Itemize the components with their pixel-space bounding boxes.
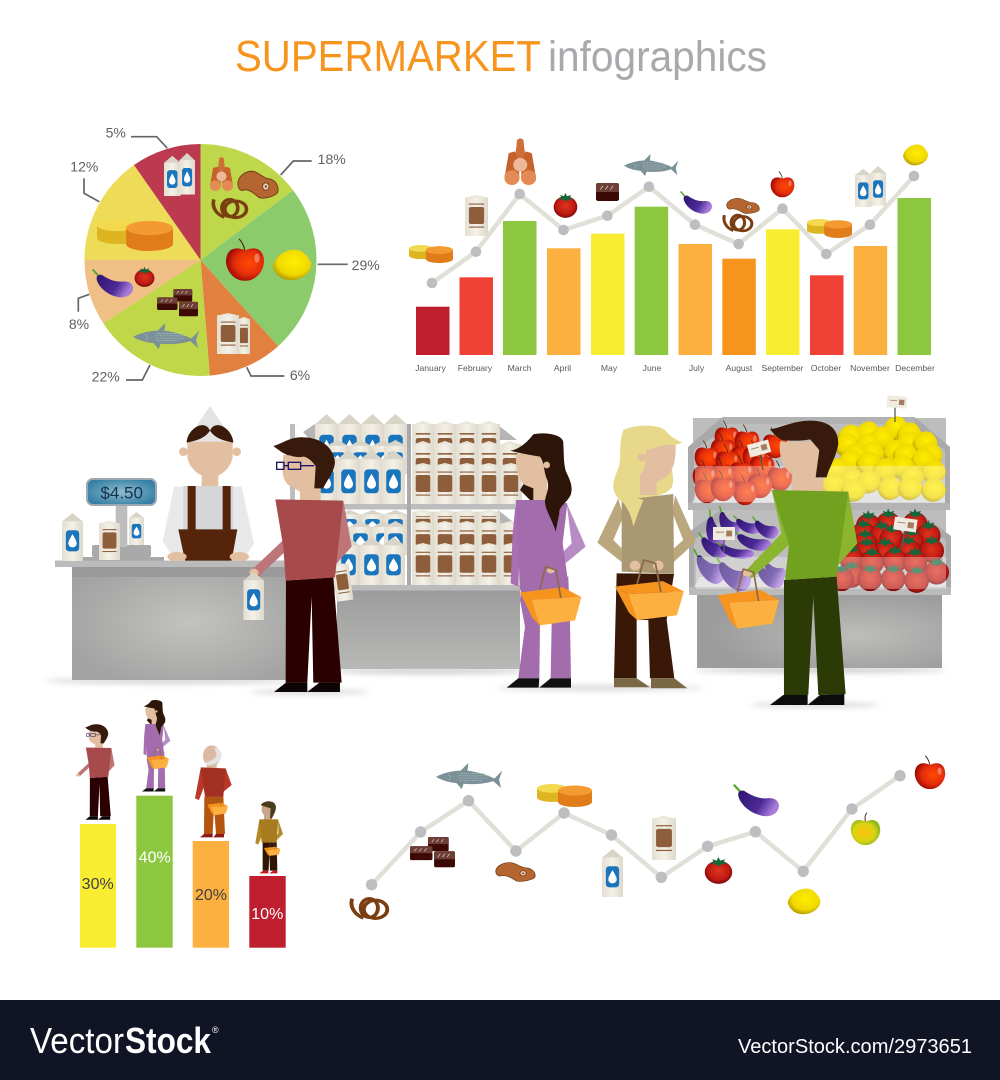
footer image id: VectorStock.com/2973651 [738,1036,972,1058]
eggplants [694,506,786,591]
month labels: January [415,363,446,373]
counter products [62,512,144,561]
month labels: June [643,363,662,373]
trend line [427,171,919,288]
pie percentages: 22% [92,368,120,384]
pie percentages: 6% [290,367,310,383]
month labels: April [554,363,571,373]
bar: 20%: 20% [195,887,227,904]
bar: 20% [193,841,229,948]
customer with glasses [249,437,352,692]
month labels: May [601,363,618,373]
floor shadows [45,667,945,707]
bar: 40% [136,796,173,948]
title: SUPERMARKET [235,32,541,81]
month labels: July [689,363,705,373]
footer bar [0,1000,1000,1080]
customer in green [718,421,857,705]
month labels: March [508,363,532,373]
pie percentages: 29% [352,257,380,273]
month labels: February [458,363,493,373]
bar chart icons [409,138,928,263]
pie chart panel [69,124,380,384]
bars [416,198,931,355]
food trend line [351,756,945,918]
title [235,32,767,81]
month labels [415,363,935,373]
trend icons [351,756,945,918]
month labels: December [895,363,935,373]
pie percentages [69,124,380,384]
pie percentages: 5% [106,124,126,140]
customer share chart [76,700,286,948]
milk carton in hand [243,572,264,620]
price text: $4.50 [100,483,143,502]
mini figure: man [76,724,115,820]
jar boxes [412,421,522,585]
footer logo: Stock [125,1020,212,1061]
pie icons [93,153,311,354]
stand base and bins [688,417,951,668]
month labels: November [850,363,890,373]
checkout counter [55,560,288,680]
line [366,770,906,890]
apples [693,421,792,505]
mini figure: boy [255,801,283,873]
bar: 10%: 10% [251,906,283,923]
tomatoes [829,508,949,593]
shelf frame [290,424,520,669]
title: infographics [548,33,767,81]
pie percentages: 12% [70,158,98,174]
glass reflections [695,466,946,589]
price tags [713,395,918,552]
footer bar: ® [212,1025,219,1035]
lemons [821,416,946,502]
mini figure: old man [195,745,232,837]
cashier [163,406,254,561]
pie percentages: 8% [69,316,89,332]
footer logo: Vector [30,1020,124,1061]
mini figure: woman [142,700,170,792]
month labels: October [811,363,841,373]
month labels: August [726,363,753,373]
milk cartons [315,414,407,585]
month labels: September [761,363,804,373]
bar: 30% [80,824,116,948]
monthly bar chart [409,138,935,373]
bar: 10% [249,876,286,948]
pie percentages: 18% [318,151,346,167]
dairy shelf [290,414,522,669]
bar: 40%: 40% [139,850,171,866]
blonde customer [597,426,696,688]
carton held behind customer [331,562,354,602]
produce stand [688,395,951,668]
price scale [83,479,164,561]
customer in purple [507,433,586,688]
pie wedges [84,144,316,376]
bar: 30%: 30% [82,876,114,893]
pie leader lines [78,137,348,380]
